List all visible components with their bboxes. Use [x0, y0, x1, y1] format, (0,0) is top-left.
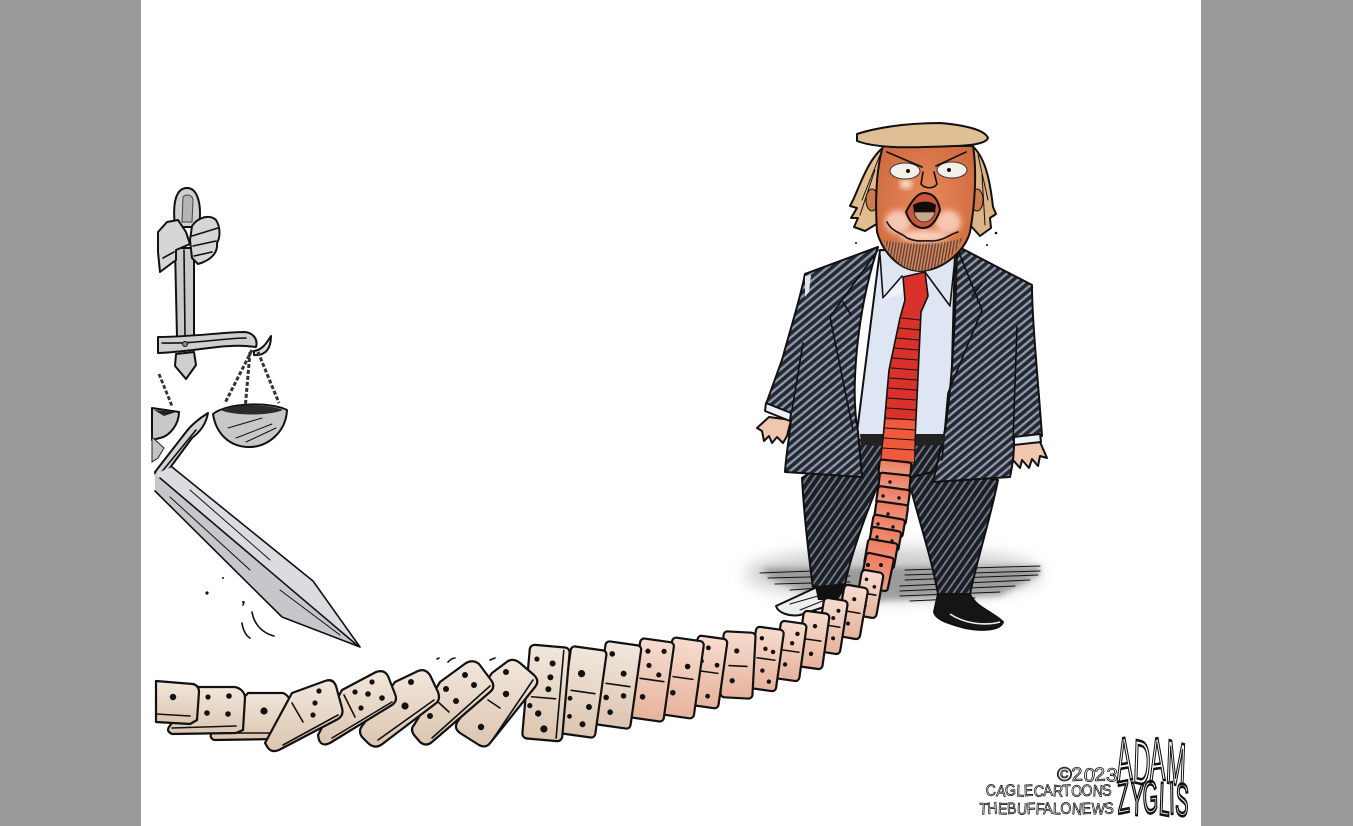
- artist signature and copyright: ©2023: [1057, 764, 1118, 787]
- artist signature and copyright: CAGLECARTOONS: [985, 782, 1112, 801]
- fallen dominoes: [156, 660, 537, 751]
- artist signature and copyright: ZYGLIS: [1114, 771, 1192, 825]
- standing dominoes, back to front: [522, 569, 884, 742]
- head: [850, 123, 997, 271]
- belt: [860, 434, 945, 446]
- domino chain: [156, 459, 912, 751]
- sword crossguard and arm fragment: [152, 413, 208, 484]
- artist signature and copyright: ADAM: [1113, 726, 1191, 798]
- trousers: [802, 440, 998, 594]
- open mouth: [906, 193, 940, 228]
- upper sword handle and pommel: [174, 188, 200, 337]
- motion ticks above falling dominoes: [437, 658, 495, 662]
- jowl lines: [887, 222, 958, 241]
- foreshortened dominoes running up the tie: [860, 459, 912, 592]
- white cartoon panel: [141, 0, 1201, 826]
- nose: [921, 172, 937, 188]
- goatee stubble: [884, 238, 962, 271]
- shoes: [776, 584, 1003, 630]
- artist signature and copyright: [979, 726, 1192, 825]
- sweat drops: [855, 232, 997, 246]
- stone hand gripping the handle: [158, 217, 220, 272]
- right scale chains and bowl: [213, 350, 287, 447]
- Lady Justice statue fragments: sword and scales: [152, 188, 360, 647]
- shirt: [856, 250, 955, 440]
- face: [876, 146, 975, 271]
- sword blade striking the dominoes: [155, 467, 360, 647]
- hair top swoop: [857, 123, 988, 147]
- motion marks under the sword: [205, 577, 274, 638]
- hair sides: [850, 144, 996, 236]
- suit jacket left side: [766, 247, 878, 477]
- hands: [757, 417, 1047, 468]
- Trump figure: [757, 123, 1047, 630]
- red tie with domino layers: [881, 272, 928, 462]
- left scale chain and bowl fragment: [152, 374, 179, 440]
- artist signature and copyright: THEBUFFALONEWS: [979, 800, 1114, 819]
- ground shadow under figure: [745, 548, 1041, 602]
- shirt cuffs: [765, 403, 1041, 445]
- scale beam: [158, 332, 271, 379]
- suit jacket right side: [933, 246, 1042, 482]
- pale cheeks around mouth: [885, 179, 961, 242]
- ears: [866, 189, 983, 211]
- eyes with glasses: [887, 152, 967, 179]
- collar: [880, 255, 955, 306]
